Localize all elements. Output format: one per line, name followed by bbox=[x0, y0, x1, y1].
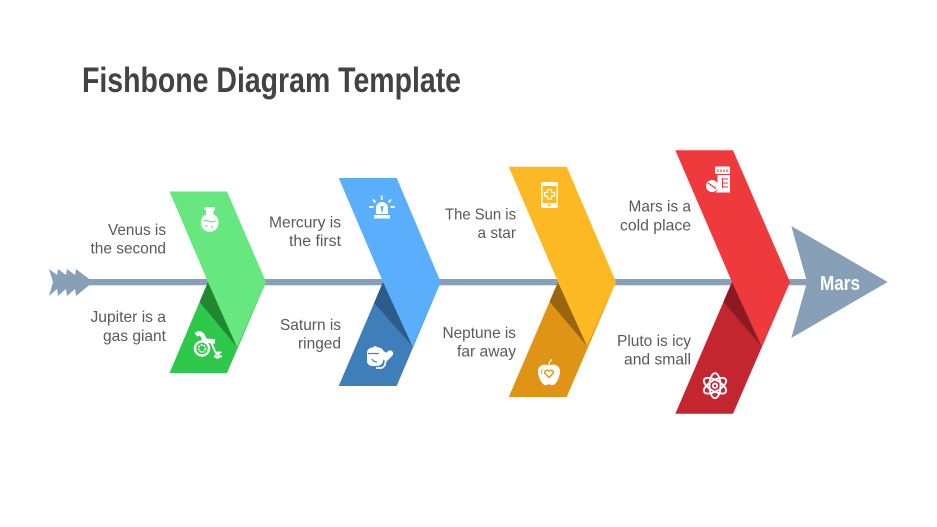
arrow head bbox=[791, 226, 888, 338]
icon: atom bbox=[701, 373, 729, 398]
text block: Mercury: the first bbox=[289, 233, 342, 250]
upper arm blue bbox=[339, 178, 441, 347]
upper arm red bbox=[675, 150, 790, 347]
lower arm blue bbox=[339, 282, 441, 386]
lower arm green bbox=[170, 282, 266, 373]
icon: wheelchair bbox=[195, 333, 222, 358]
icon: siren bbox=[369, 196, 395, 218]
text block: Venus bbox=[90, 222, 166, 258]
bone: yellow bbox=[509, 167, 616, 397]
bone: red bbox=[675, 150, 790, 414]
text block: Mars: Mars is a bbox=[628, 199, 691, 216]
lower arm yellow bbox=[509, 282, 616, 397]
bone: blue bbox=[339, 178, 441, 386]
spine line bbox=[85, 279, 815, 285]
text block: Saturn: ringed bbox=[298, 336, 341, 353]
text block: Neptune: Neptune is bbox=[442, 325, 516, 342]
icon: apple with heart bbox=[538, 360, 560, 385]
icon: flask bbox=[201, 207, 218, 232]
text block: Venus: Venus is bbox=[108, 222, 166, 239]
text block: Neptune: far away bbox=[457, 344, 516, 361]
text block: Jupiter: Jupiter is a bbox=[90, 309, 166, 326]
icon: medical phone bbox=[541, 182, 558, 208]
icon: stethoscope heart bbox=[367, 346, 393, 368]
wedge shadow green bbox=[200, 282, 237, 347]
upper arm green bbox=[170, 192, 266, 347]
text block: Mars: cold place bbox=[620, 218, 691, 235]
bone: green bbox=[170, 192, 266, 373]
text block: Mercury bbox=[269, 214, 342, 250]
text block: The Sun bbox=[445, 206, 517, 242]
icon: arrow tail fletching bbox=[49, 269, 93, 296]
text block: Saturn: Saturn is bbox=[280, 317, 341, 334]
wedge shadow yellow bbox=[550, 282, 587, 346]
text block: Mars bbox=[620, 199, 691, 235]
title: Fishbone Diagram Template bbox=[82, 61, 461, 100]
text block: Neptune bbox=[442, 325, 516, 361]
icon: medicine bottle and pill bbox=[706, 166, 730, 192]
effect label: Mars: Mars bbox=[820, 273, 860, 295]
text block: Jupiter: gas giant bbox=[103, 328, 167, 345]
text block: The Sun: The Sun is bbox=[445, 206, 516, 223]
upper arm yellow bbox=[509, 167, 616, 346]
text block: The Sun: a star bbox=[478, 225, 517, 242]
text block: Pluto: Pluto is icy bbox=[617, 333, 691, 350]
text block: Pluto: and small bbox=[624, 351, 691, 368]
wedge shadow red bbox=[724, 282, 762, 347]
text block: Mercury: Mercury is bbox=[269, 214, 341, 231]
text block: Saturn bbox=[280, 317, 341, 353]
text block: Venus: the second bbox=[90, 241, 166, 258]
text block: Jupiter bbox=[90, 309, 167, 345]
spine with tail and head bbox=[49, 226, 888, 338]
wedge shadow blue bbox=[374, 282, 413, 347]
text block: Pluto bbox=[617, 333, 691, 368]
lower arm red bbox=[675, 282, 790, 414]
